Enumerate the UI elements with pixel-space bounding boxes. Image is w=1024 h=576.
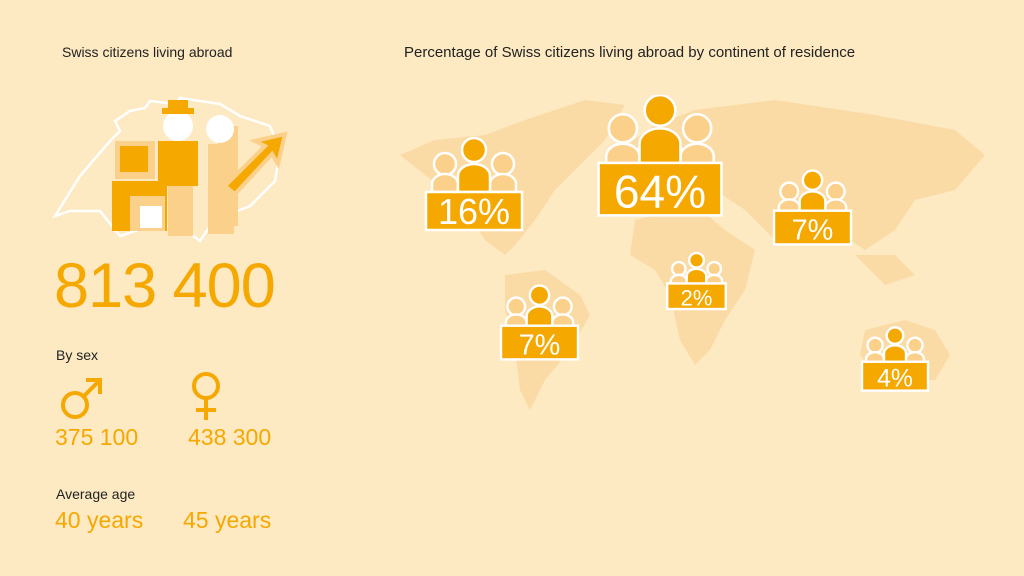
title: left: Swiss citizens living abroad: [62, 44, 232, 60]
badge: Asia 7%: [772, 169, 852, 246]
illustration: emigrants over Switzerland: [52, 96, 288, 243]
badge: South America 7%: 7%: [519, 330, 560, 361]
title: map: Percentage of Swiss citizens living abroad by continent of residence: [404, 44, 855, 61]
female count: 438 300: [188, 424, 271, 450]
badge: Oceania 4%: 4%: [877, 366, 913, 392]
badge: Oceania 4%: [860, 326, 930, 392]
badge: South America 7%: [500, 284, 580, 361]
icon: male: [61, 378, 102, 419]
badge: Africa 2%: 2%: [681, 285, 712, 310]
label: average age: Average age: [56, 486, 135, 502]
badge: Europe 64%: 64%: [614, 166, 706, 218]
badge: Europe 64%: [597, 95, 723, 218]
badge: North America 16%: [424, 136, 524, 232]
icon: female: [192, 372, 220, 420]
male count: 375 100: [55, 424, 138, 450]
male age: 40 years: [55, 507, 143, 533]
badge: Africa 2%: [666, 252, 727, 310]
badge: North America 16%: 16%: [438, 191, 510, 232]
world map: [400, 100, 985, 410]
total number: 813 400: [54, 251, 275, 321]
badge: Asia 7%: 7%: [792, 215, 833, 246]
label: by sex: By sex: [56, 347, 98, 363]
female age: 45 years: [183, 507, 271, 533]
